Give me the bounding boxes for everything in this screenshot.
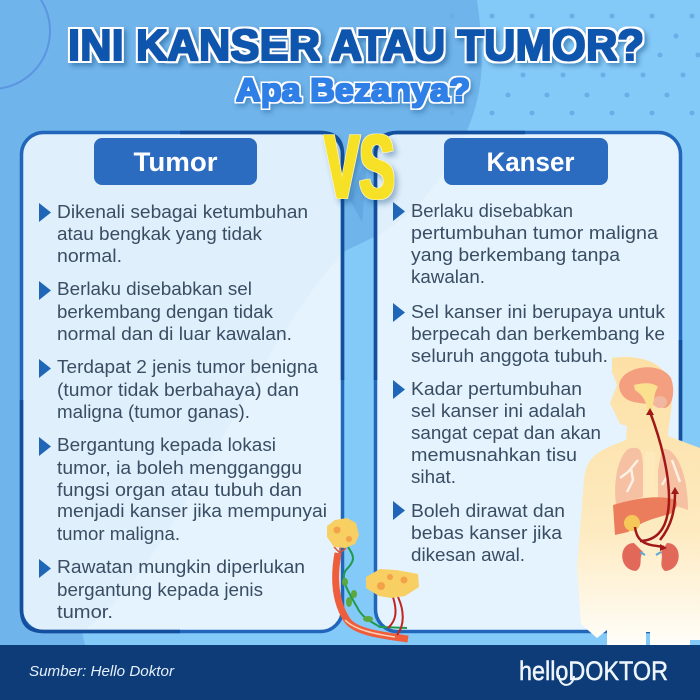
bullet list: tumor: bergantung kepada jenis [57, 579, 263, 600]
panel: tumor [22, 132, 342, 632]
bullet list: tumor: menjadi kanser jika mempunyai [57, 500, 327, 521]
illustration: blood vessels and tumor [327, 518, 419, 639]
VS badge: VS [324, 117, 394, 218]
tumor arteries [388, 597, 403, 635]
heading: tumor: Tumor [134, 147, 218, 177]
bullet list: tumor: atau bengkak yang tidak [57, 223, 263, 244]
bullet list: tumor: normal. [57, 245, 122, 266]
logo: helloDOKTOR [519, 656, 668, 686]
trachea [645, 452, 655, 498]
bullet list: tumor: Bergantung kepada lokasi [57, 434, 276, 455]
liver [613, 497, 677, 535]
lungs [615, 448, 643, 505]
bullet list: kanser: yang berkembang tanpa [411, 244, 621, 265]
blood vessel [336, 553, 408, 639]
bullet list: tumor: tumor, ia boleh mengganggu [57, 457, 302, 478]
bullet list: kanser: memusnahkan tisu [411, 444, 577, 465]
bullet list: tumor: berkembang dengan tidak [57, 301, 274, 322]
bullet list: kanser: berpecah dan berkembang ke [411, 323, 665, 344]
bullet list: kanser: seluruh anggota tubuh. [411, 345, 608, 366]
bullet list: tumor: Dikenali sebagai ketumbuhan [57, 201, 308, 222]
brain [619, 367, 673, 408]
bullet list: tumor: Terdapat 2 jenis tumor benigna [57, 356, 319, 377]
bullet list: kanser: Sel kanser ini berupaya untuk [411, 301, 666, 322]
bullet list: kanser: bebas kanser jika [411, 522, 563, 543]
heading: kanser [444, 138, 608, 185]
title: INI KANSER ATAU TUMOR? [68, 21, 644, 70]
bullet list: tumor: tumor. [57, 601, 113, 622]
subtitle: Apa Bezanya? [236, 72, 470, 108]
bullet list: kanser: sihat. [411, 466, 456, 487]
bullet list: kanser: dikesan awal. [411, 544, 525, 565]
bullet list: tumor: tumor maligna. [57, 523, 180, 544]
bullet list: kanser [393, 200, 666, 565]
footer bar [0, 645, 700, 700]
arrows [635, 412, 675, 547]
bullet list: kanser: sel kanser ini adalah [411, 400, 586, 421]
bullet list: tumor: Rawatan mungkin diperlukan [57, 556, 305, 577]
bullet list: tumor: maligna (tumor ganas). [57, 401, 250, 422]
heading: tumor [94, 138, 257, 185]
bullet list: kanser: Boleh dirawat dan [411, 500, 565, 521]
bullet list: kanser: kawalan. [411, 266, 485, 287]
tumor 2 [366, 569, 419, 598]
panel: kanser [376, 132, 680, 632]
bullet list: kanser: Berlaku disebabkan [411, 200, 573, 221]
tumor 1 [327, 518, 359, 548]
lymph vessel [344, 547, 407, 628]
body silhouette [577, 357, 700, 645]
bullet list: tumor [39, 201, 327, 622]
bullet list: tumor: fungsi organ atau tubuh dan [57, 479, 302, 500]
heading: kanser: Kanser [486, 147, 575, 177]
bullet list: tumor: normal dan di luar kawalan. [57, 323, 292, 344]
bullet list: kanser: pertumbuhan tumor maligna [411, 222, 659, 243]
bullet list: kanser: Kadar pertumbuhan [411, 378, 582, 399]
illustration: human body [577, 357, 700, 645]
source text: Sumber: Hello Doktor [29, 664, 175, 680]
gallbladder tumor [624, 515, 640, 531]
bullet list: tumor: (tumor tidak berbahaya) dan [57, 379, 299, 400]
bullet list: tumor: Berlaku disebabkan sel [57, 278, 252, 299]
kidneys [622, 543, 643, 571]
bullet list: kanser: sangat cepat dan akan [411, 422, 601, 443]
